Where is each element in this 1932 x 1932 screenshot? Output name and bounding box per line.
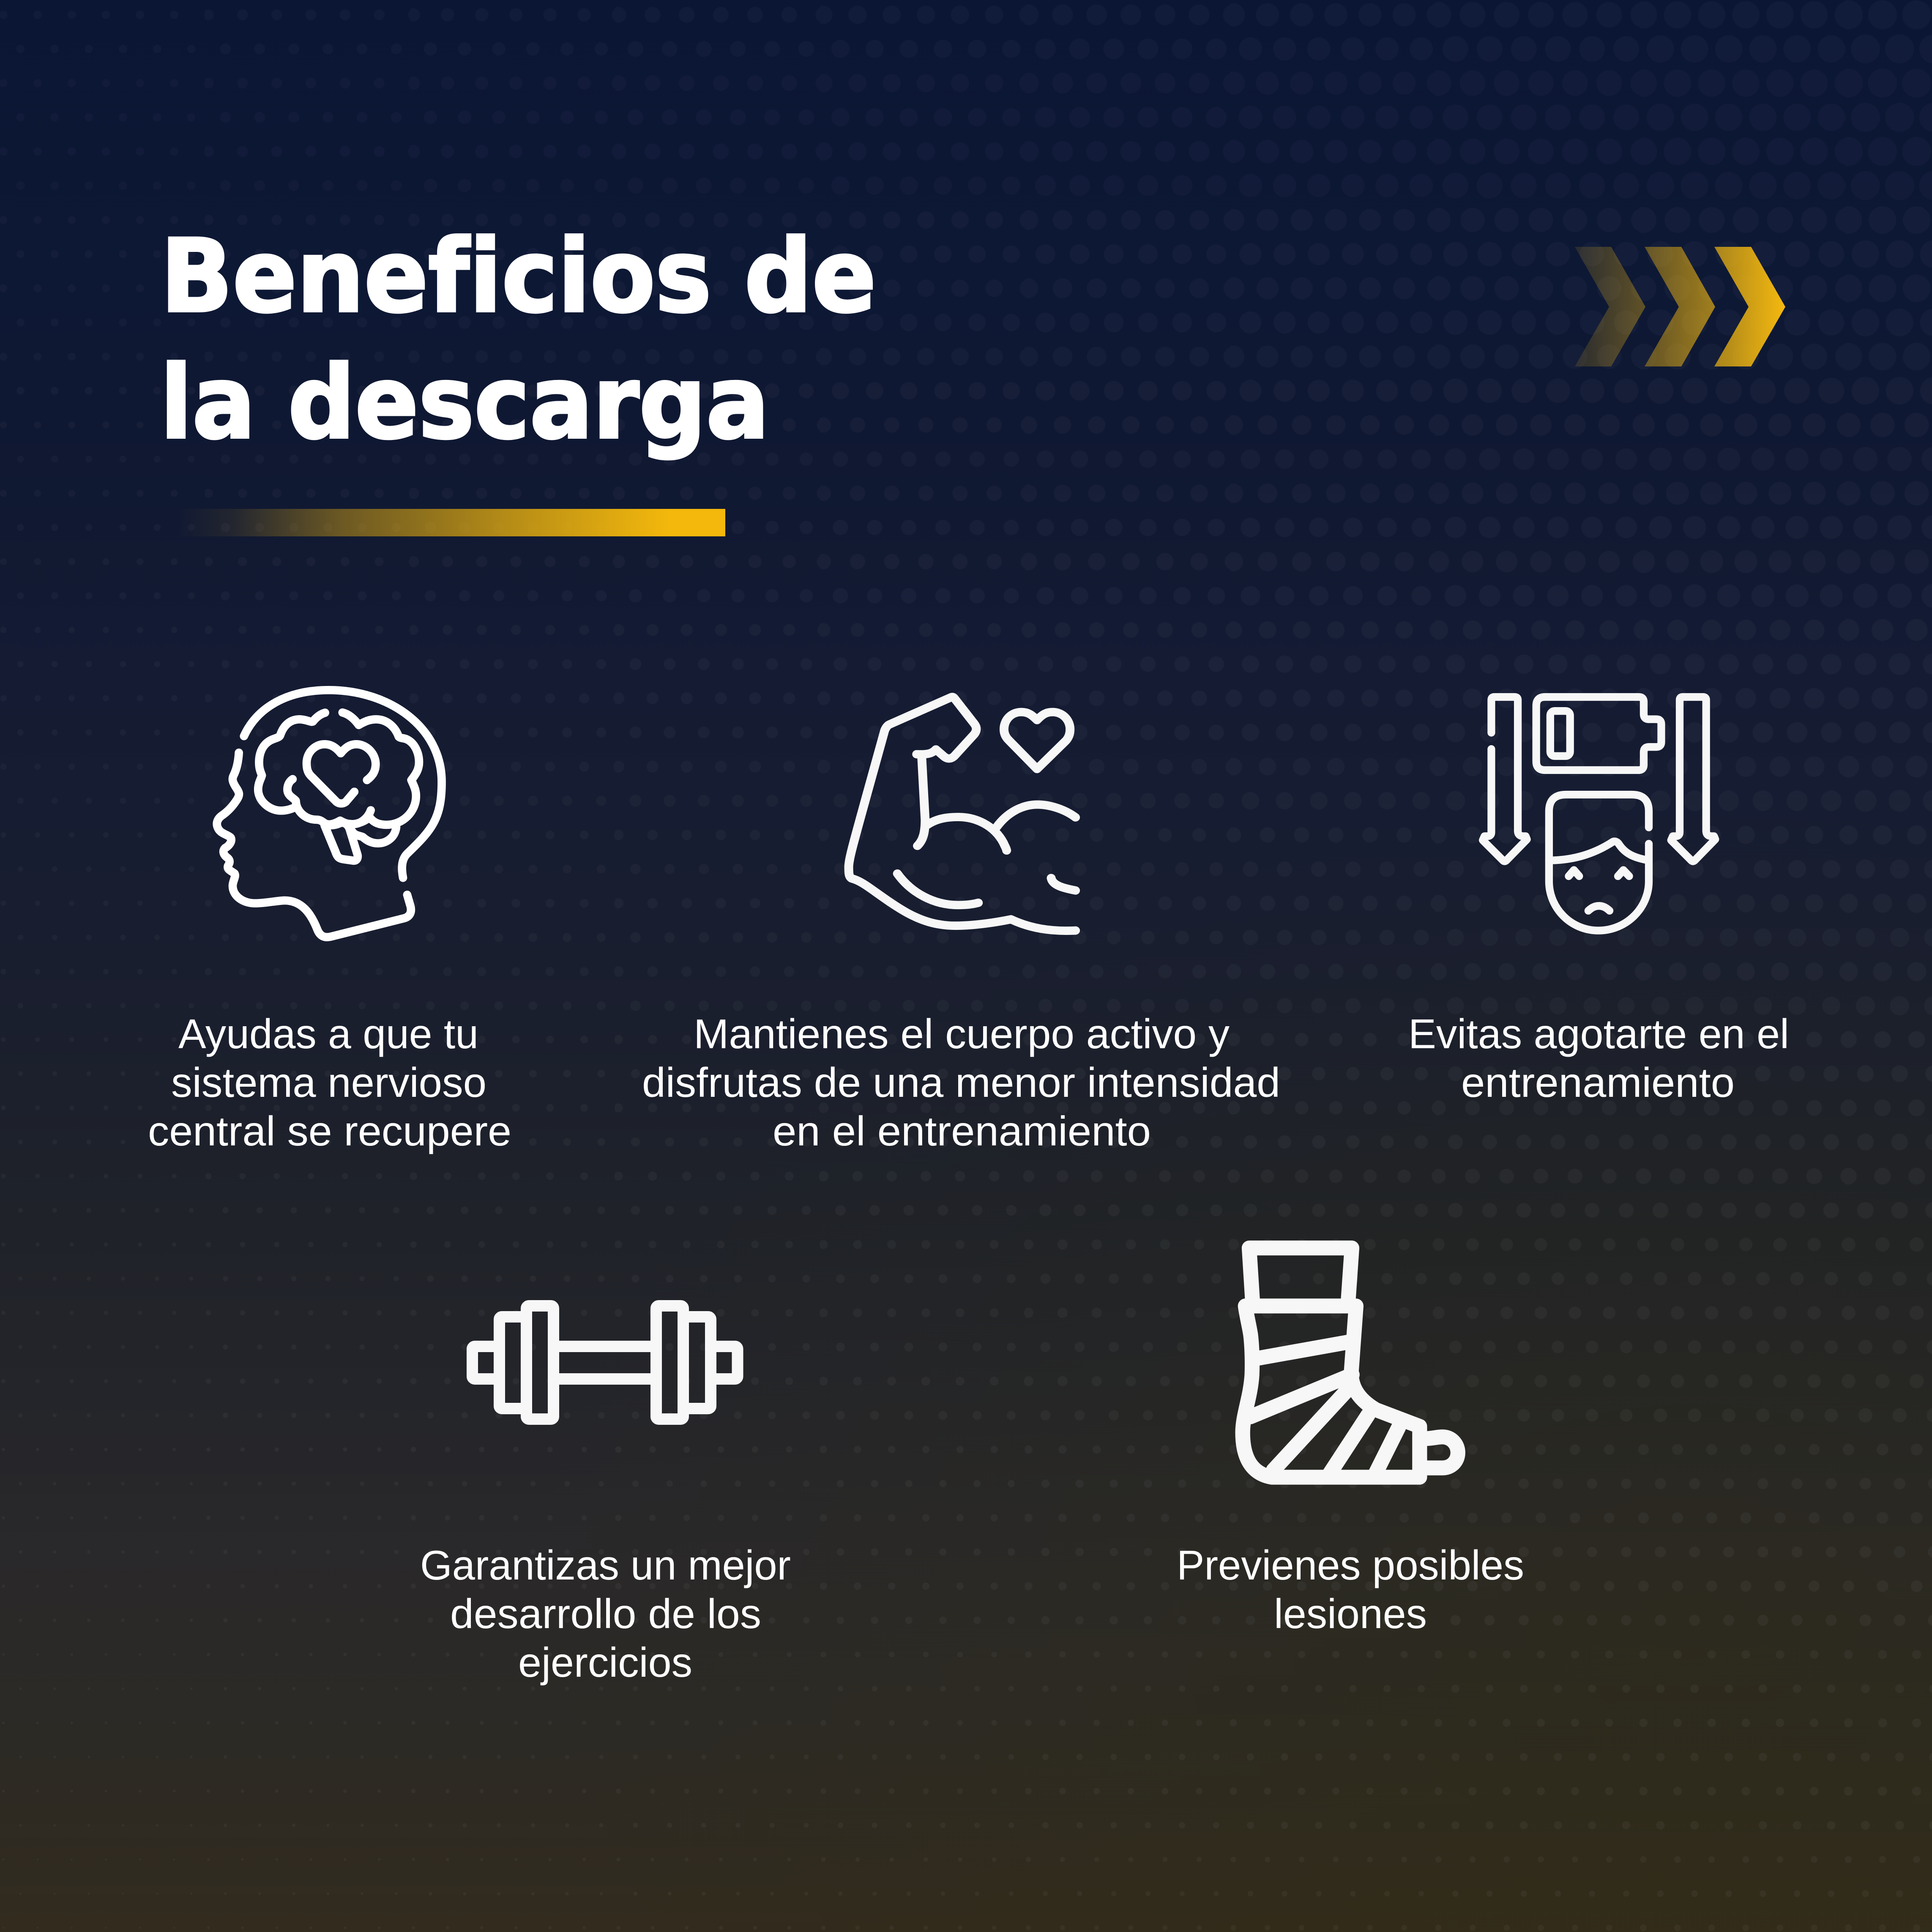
title — [160, 218, 876, 462]
text: injury prevention benefit: Previenes posibles — [1177, 1542, 1524, 1588]
title underline gradient bar — [178, 509, 725, 536]
text: avoid exhaustion benefit — [1408, 1011, 1789, 1106]
text: nervous system benefit: sistema nervioso — [171, 1059, 486, 1106]
text: nervous system benefit: central se recupere — [148, 1108, 511, 1154]
text: injury prevention benefit: lesiones — [1274, 1590, 1427, 1637]
text: active body benefit: disfrutas de una menor intensidad — [642, 1059, 1280, 1106]
text: nervous system benefit — [148, 1011, 511, 1154]
text: avoid exhaustion benefit: Evitas agotarte en el — [1408, 1011, 1789, 1057]
icon: foot in cast — [1243, 1248, 1458, 1477]
text: better exercise development benefit: desarrollo de los — [450, 1590, 761, 1637]
text: active body benefit — [642, 1011, 1280, 1154]
icon: head with brain and heart — [217, 690, 442, 937]
title: la descarga — [160, 344, 769, 462]
text: avoid exhaustion benefit: entrenamiento — [1461, 1059, 1735, 1106]
text: injury prevention benefit — [1177, 1542, 1524, 1637]
text: nervous system benefit: Ayudas a que tu — [178, 1011, 478, 1057]
text: active body benefit: Mantienes el cuerpo activo y — [694, 1011, 1230, 1057]
icon: flexed arm with heart — [849, 697, 1076, 931]
icon: dumbbell — [473, 1306, 738, 1419]
text: better exercise development benefit — [420, 1542, 791, 1686]
icon: three chevron arrows — [1575, 247, 1785, 366]
title: Beneficios de — [161, 218, 876, 335]
icon: low battery, down arrows and tired face — [1483, 697, 1715, 931]
text: better exercise development benefit: Garantizas un mejor — [420, 1542, 791, 1588]
text: better exercise development benefit: ejercicios — [518, 1639, 692, 1686]
text: active body benefit: en el entrenamiento — [773, 1108, 1151, 1154]
